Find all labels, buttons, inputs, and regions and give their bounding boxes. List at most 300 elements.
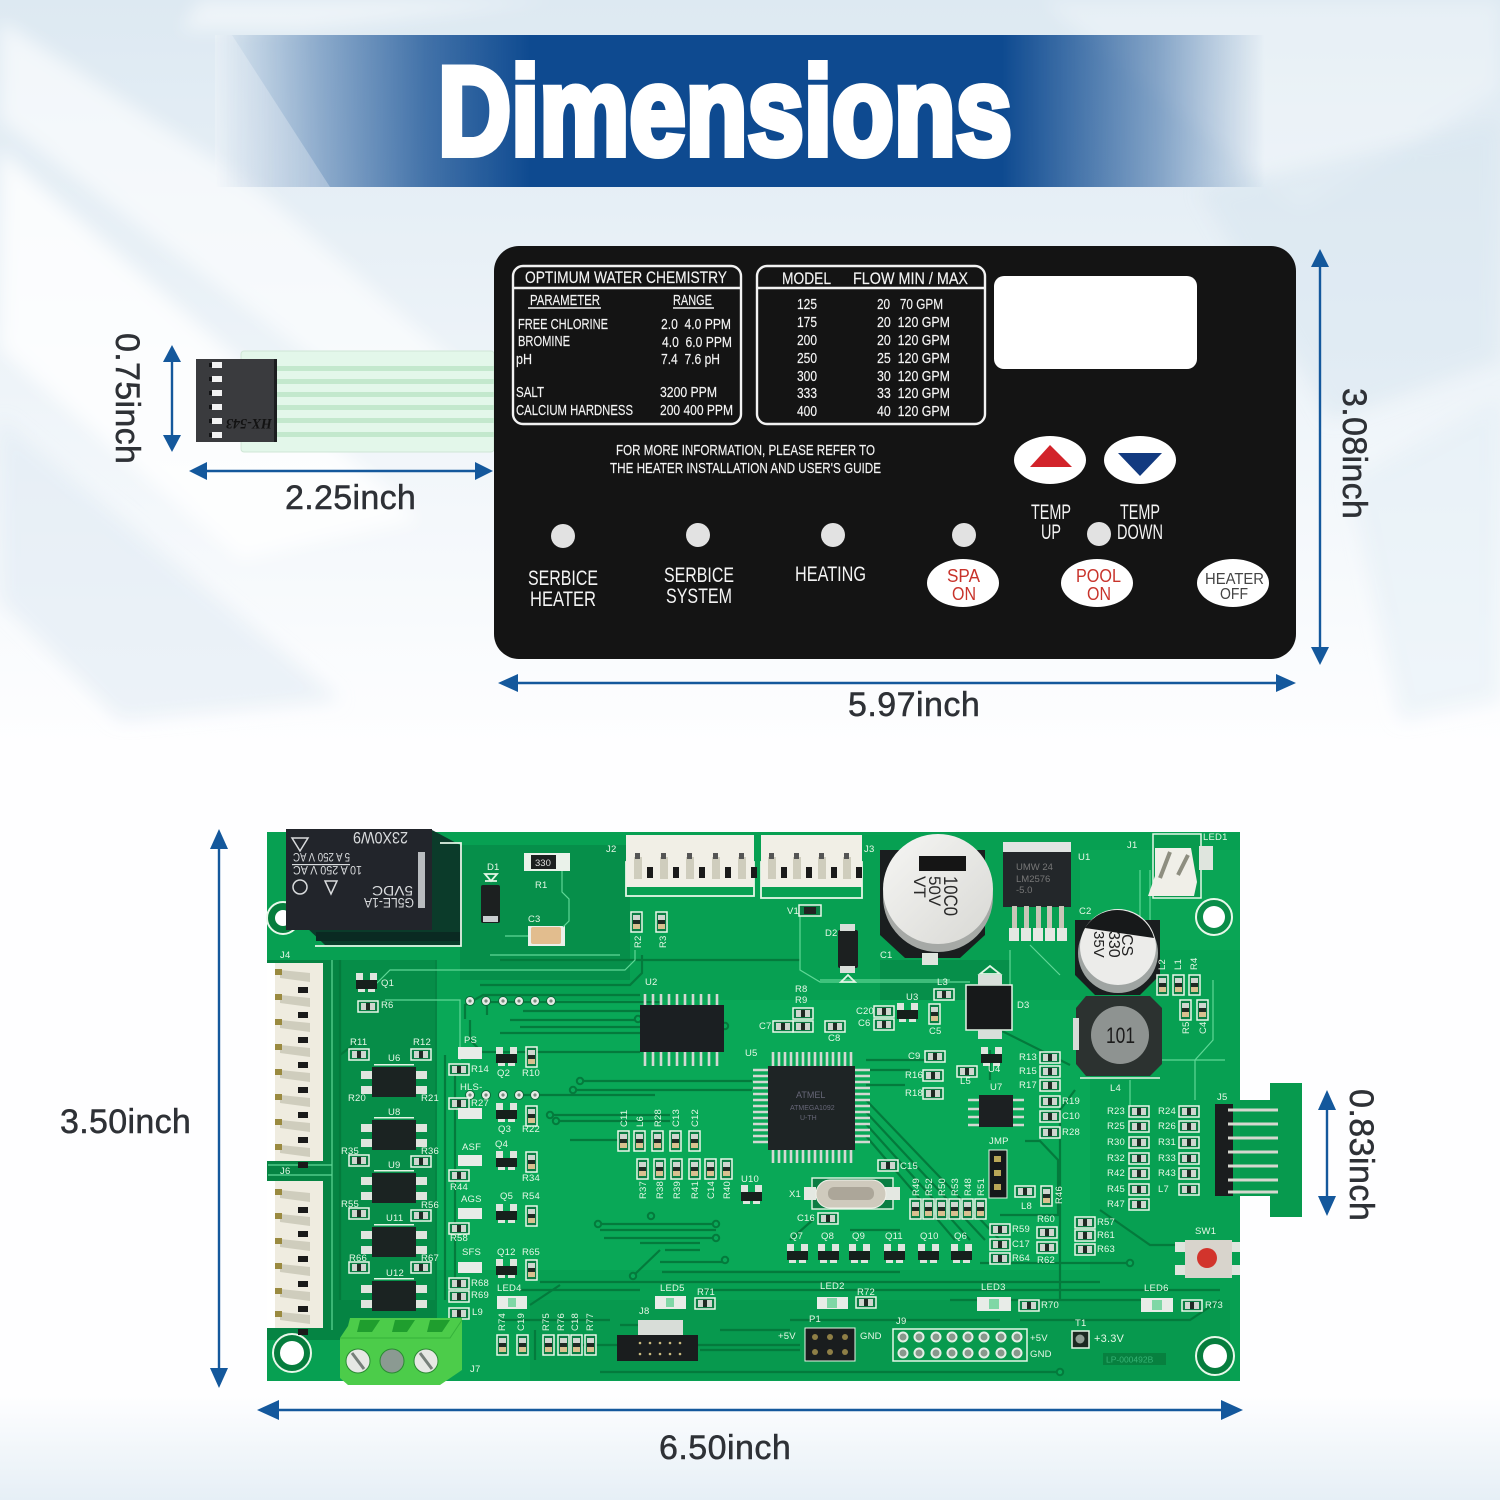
capacitor C1 bbox=[880, 834, 993, 965]
resistors near J5: R32 bbox=[1107, 1153, 1125, 1164]
bottom components: R77 bbox=[585, 1313, 596, 1331]
water chemistry table: OPTIMUM WATER CHEMISTRY bbox=[525, 268, 727, 287]
copper traces bbox=[268, 870, 1225, 1375]
water chemistry table: 7.4 7.6 pH bbox=[661, 352, 720, 368]
parts around C2 right: L1 bbox=[1173, 959, 1184, 970]
dimension: ribbon height 0.75inch: 0.75inch bbox=[108, 333, 146, 464]
left column resistors: R66 bbox=[349, 1253, 367, 1264]
small parts near relay: C3 bbox=[528, 914, 541, 925]
chip U2 bbox=[640, 977, 724, 1066]
relay: 10 A 250 V AC bbox=[293, 863, 362, 877]
power section parts: C20 bbox=[856, 1006, 874, 1017]
button: pool on bbox=[1061, 559, 1133, 607]
label: temp down: DOWN bbox=[1117, 521, 1163, 544]
model flow table: MODEL bbox=[782, 269, 831, 288]
relay: G5LE-1A bbox=[363, 895, 414, 911]
test point T1 bbox=[1072, 1318, 1125, 1348]
transistors row: Q7 bbox=[790, 1231, 803, 1242]
dimension: panel height 3.08inch bbox=[1311, 249, 1373, 665]
capacitor C2: CS bbox=[1118, 934, 1135, 956]
signal sections: R22 bbox=[522, 1124, 540, 1135]
dimension: connector tab 0.83inch bbox=[1318, 1089, 1380, 1221]
connector J4 bbox=[267, 950, 323, 1168]
model flow table: 300 bbox=[797, 369, 817, 385]
dimension: ribbon height 0.75inch bbox=[108, 333, 181, 464]
label: service system: SYSTEM bbox=[666, 585, 732, 608]
resistor bank: R50 bbox=[937, 1178, 948, 1196]
lower right parts bbox=[990, 1214, 1115, 1266]
inductor L4 bbox=[1073, 996, 1162, 1094]
resistors near J5: R45 bbox=[1107, 1184, 1125, 1195]
header P1: +5V bbox=[778, 1331, 796, 1342]
capacitor C2: 35V bbox=[1090, 931, 1107, 958]
model flow table: 20 120 GPM bbox=[877, 333, 950, 349]
label: temp up: UP bbox=[1041, 521, 1061, 544]
optocouplers bbox=[361, 1053, 427, 1311]
test point T1: T1 bbox=[1075, 1318, 1086, 1329]
header P1: P1 bbox=[809, 1314, 821, 1325]
model flow table: 333 bbox=[797, 386, 817, 402]
power section parts: R8 bbox=[795, 984, 808, 995]
title banner bbox=[215, 35, 1265, 187]
signal sections: Q12 bbox=[497, 1247, 516, 1258]
power section parts: U4 bbox=[988, 1064, 1001, 1075]
resistor bank: R52 bbox=[924, 1178, 935, 1196]
model flow table: 33 120 GPM bbox=[877, 386, 950, 402]
parts around C2 right bbox=[1157, 957, 1209, 1034]
crystal X1: C16 bbox=[797, 1213, 815, 1224]
capacitor C2: 330 bbox=[1105, 931, 1122, 958]
connector J6: J6 bbox=[280, 1166, 290, 1177]
optocouplers: U12 bbox=[386, 1268, 404, 1279]
R2 R3: R2 bbox=[633, 935, 644, 948]
crystal X1: X1 bbox=[789, 1189, 801, 1200]
signal sections: R10 bbox=[522, 1068, 540, 1079]
button: heater off bbox=[1197, 559, 1269, 607]
jumper JMP: JMP bbox=[989, 1136, 1009, 1147]
left column resistors: R6 bbox=[381, 1000, 394, 1011]
LEDs row bbox=[655, 1281, 1223, 1312]
water chemistry table: 2.0 4.0 PPM bbox=[661, 317, 731, 333]
resistor bank: R48 bbox=[963, 1178, 974, 1196]
dimension: panel width 5.97inch: 5.97inch bbox=[848, 686, 980, 724]
bottom components: R75 bbox=[541, 1313, 552, 1331]
model flow table: 200 bbox=[797, 333, 817, 349]
left column resistors: R56 bbox=[421, 1200, 439, 1211]
bottom components: R74 bbox=[497, 1313, 508, 1331]
lower right parts: R60 bbox=[1037, 1214, 1055, 1225]
transistors row: Q9 bbox=[852, 1231, 865, 1242]
jumper JMP bbox=[989, 1136, 1009, 1198]
ribbon connector: HX-543 bbox=[226, 415, 273, 431]
signal sections: PS bbox=[464, 1035, 477, 1046]
signal sections: R14 bbox=[471, 1064, 489, 1075]
connector J1 and LED1: LED1 bbox=[1203, 832, 1228, 843]
model flow table: FLOW MIN / MAX bbox=[853, 269, 968, 288]
centre capacitors: R39 bbox=[672, 1181, 683, 1199]
indicator lights bbox=[551, 522, 1111, 548]
title: Dimensions bbox=[438, 42, 1012, 182]
model flow table: 20 120 GPM bbox=[877, 315, 950, 331]
centre capacitors bbox=[618, 1109, 762, 1204]
connector J3: J3 bbox=[864, 844, 874, 855]
parts around C2 right: C4 bbox=[1198, 1021, 1209, 1034]
relay bbox=[286, 828, 462, 946]
optocouplers: U11 bbox=[386, 1213, 403, 1224]
header P1 bbox=[778, 1314, 882, 1361]
dimension: board width 6.50inch: 6.50inch bbox=[659, 1429, 791, 1467]
power section parts: C5 bbox=[929, 1026, 942, 1037]
regulator U1: -5.0 bbox=[1016, 885, 1032, 896]
left column resistors: R36 bbox=[421, 1146, 439, 1157]
water chemistry table bbox=[513, 266, 741, 424]
centre capacitors: R37 bbox=[638, 1181, 649, 1199]
power section parts: L5 bbox=[960, 1076, 971, 1087]
dimension: ribbon width 2.25inch bbox=[189, 462, 493, 517]
header J9: GND bbox=[1030, 1349, 1052, 1360]
transistors row: Q10 bbox=[920, 1231, 939, 1242]
model flow table: 20 70 GPM bbox=[877, 297, 943, 313]
microcontroller U5: U5 bbox=[745, 1048, 758, 1059]
label: service heater: SERBICE bbox=[528, 567, 598, 590]
resistors near J5: L7 bbox=[1158, 1184, 1169, 1195]
relay: 5 A 250 V AC bbox=[293, 850, 350, 864]
chip U2: U2 bbox=[645, 977, 658, 988]
power section parts: C6 bbox=[858, 1018, 871, 1029]
inductor L4: L4 bbox=[1110, 1083, 1121, 1094]
signal sections: R27 bbox=[471, 1098, 489, 1109]
power section parts: R15 bbox=[1019, 1066, 1037, 1077]
lower right parts: R64 bbox=[1012, 1253, 1030, 1264]
button: pool on: ON bbox=[1087, 584, 1111, 604]
power section parts: R16 bbox=[905, 1070, 923, 1081]
switch SW1 bbox=[1175, 1226, 1240, 1278]
water chemistry table: pH bbox=[516, 352, 532, 368]
capacitor C1: 10C0 bbox=[939, 876, 960, 916]
info note: THE HEATER INSTALLATION AND USER'S GUIDE bbox=[610, 461, 881, 477]
button: heater off: HEATER bbox=[1205, 571, 1264, 588]
centre capacitors: C11 bbox=[619, 1110, 630, 1127]
header J9: +5V bbox=[1030, 1333, 1048, 1344]
signal sections: HLS- bbox=[460, 1082, 482, 1093]
capacitor C1: 50V bbox=[925, 876, 944, 907]
left column resistors: Q1 bbox=[381, 978, 394, 989]
R2 R3: R3 bbox=[658, 935, 669, 948]
relay: 5VDC bbox=[372, 883, 413, 899]
button: heater off: OFF bbox=[1220, 586, 1248, 603]
centre capacitors: C13 bbox=[671, 1109, 682, 1127]
power section parts bbox=[759, 905, 1080, 1138]
resistors near J5: R23 bbox=[1107, 1106, 1125, 1117]
water chemistry table: 4.0 6.0 PPM bbox=[662, 335, 732, 351]
lower right parts: C17 bbox=[1012, 1239, 1030, 1250]
microcontroller U5: U-TH bbox=[800, 1115, 817, 1122]
ribbon cable with connector bbox=[196, 351, 494, 452]
signal sections: R69 bbox=[471, 1290, 489, 1301]
optocouplers: U9 bbox=[388, 1160, 401, 1171]
resistor bank: R53 bbox=[950, 1178, 961, 1196]
resistors near J5: R30 bbox=[1107, 1137, 1125, 1148]
regulator U1: U1 bbox=[1078, 852, 1091, 863]
signal sections: R54 bbox=[522, 1191, 540, 1202]
signal sections: R68 bbox=[471, 1278, 489, 1289]
small parts near relay: 330 bbox=[535, 858, 551, 869]
model flow table bbox=[757, 266, 985, 424]
optocouplers: U6 bbox=[388, 1053, 401, 1064]
signal sections bbox=[449, 1035, 540, 1319]
centre capacitors: R40 bbox=[722, 1181, 733, 1199]
header J9: J9 bbox=[896, 1316, 906, 1327]
connector J3 bbox=[761, 835, 874, 898]
centre capacitors: C14 bbox=[706, 1181, 717, 1199]
mounting holes bbox=[267, 899, 1234, 1375]
left column resistors: R67 bbox=[421, 1253, 439, 1264]
transistors row: Q8 bbox=[821, 1231, 834, 1242]
water chemistry table: BROMINE bbox=[518, 334, 570, 350]
capacitor C2: C2 bbox=[1079, 906, 1092, 917]
water chemistry table: RANGE bbox=[673, 293, 712, 309]
lower right parts: R59 bbox=[1012, 1224, 1030, 1235]
LEDs row: LED3 bbox=[981, 1282, 1006, 1293]
power section parts: U7 bbox=[990, 1082, 1003, 1093]
connector J2: J2 bbox=[606, 844, 616, 855]
optocouplers: U8 bbox=[388, 1107, 401, 1118]
power section parts: R19 bbox=[1062, 1096, 1080, 1107]
resistor bank bbox=[910, 1178, 1065, 1219]
small parts near relay bbox=[481, 853, 570, 946]
resistors near J5 bbox=[1107, 1106, 1199, 1210]
lower right parts: R57 bbox=[1097, 1217, 1115, 1228]
model flow table: 30 120 GPM bbox=[877, 369, 950, 385]
label: temp down bbox=[1117, 501, 1163, 544]
crystal X1: C15 bbox=[900, 1161, 918, 1172]
label: temp down: TEMP bbox=[1120, 501, 1160, 524]
resistors near J5: R31 bbox=[1158, 1137, 1176, 1148]
button: temp down bbox=[1104, 436, 1176, 484]
label: service heater: HEATER bbox=[530, 588, 596, 611]
label: service heater bbox=[528, 567, 598, 611]
transistors row: Q6 bbox=[954, 1231, 967, 1242]
resistor bank: L8 bbox=[1021, 1201, 1032, 1212]
connector J4: J4 bbox=[280, 950, 290, 961]
diode D3 bbox=[966, 966, 1030, 1039]
water chemistry table: PARAMETER bbox=[530, 293, 600, 309]
dimension: board height 3.50inch bbox=[60, 829, 228, 1388]
resistors near J5: R42 bbox=[1107, 1168, 1125, 1179]
button: spa on bbox=[927, 559, 999, 607]
LEDs row: R72 bbox=[857, 1287, 875, 1298]
power section parts: C9 bbox=[908, 1051, 921, 1062]
model flow table: 25 120 GPM bbox=[877, 351, 950, 367]
capacitor C2 bbox=[1075, 906, 1160, 995]
parts around C2 right: L2 bbox=[1157, 959, 1168, 970]
transistors row: Q11 bbox=[885, 1231, 903, 1242]
PCB circuit board bbox=[267, 828, 1302, 1385]
lower right parts: R61 bbox=[1097, 1230, 1115, 1241]
power section parts: C7 bbox=[759, 1021, 772, 1032]
terminal block J7: J7 bbox=[470, 1364, 480, 1375]
dimension: board height 3.50inch: 3.50inch bbox=[60, 1103, 191, 1141]
regulator U1: LM2576 bbox=[1016, 874, 1050, 885]
parts around C2 right: R4 bbox=[1189, 957, 1200, 970]
centre capacitors: R28 bbox=[653, 1109, 664, 1127]
part number box: LP-000492B bbox=[1106, 1354, 1154, 1364]
dimension: connector tab 0.83inch: 0.83inch bbox=[1342, 1089, 1380, 1221]
connector J5 with pins bbox=[1215, 1092, 1278, 1196]
signal sections: L9 bbox=[472, 1307, 483, 1318]
LEDs row: LED5 bbox=[660, 1283, 685, 1294]
resistor bank: R51 bbox=[976, 1178, 987, 1196]
dimension: board width 6.50inch bbox=[257, 1400, 1243, 1467]
centre capacitors: L6 bbox=[635, 1116, 646, 1127]
signal sections: R34 bbox=[522, 1173, 540, 1184]
part number box bbox=[1103, 1353, 1166, 1365]
signal sections: SFS bbox=[462, 1247, 481, 1258]
label: temp up: TEMP bbox=[1031, 501, 1071, 524]
left column resistors: R55 bbox=[341, 1199, 359, 1210]
power section parts: R28 bbox=[1062, 1127, 1080, 1138]
membrane panel bbox=[494, 246, 1296, 659]
transistors row bbox=[787, 1231, 972, 1263]
LEDs row: R73 bbox=[1205, 1300, 1223, 1311]
button: temp up bbox=[1014, 436, 1086, 484]
label: service system: SERBICE bbox=[664, 564, 734, 587]
power section parts: U3 bbox=[906, 992, 919, 1003]
resistor bank: R46 bbox=[1054, 1186, 1065, 1204]
model flow table: 40 120 GPM bbox=[877, 404, 950, 420]
signal sections: R58 bbox=[450, 1233, 468, 1244]
model flow table: 400 bbox=[797, 404, 817, 420]
test pads row bbox=[466, 996, 556, 1100]
label: service system bbox=[664, 564, 734, 608]
capacitor C1: VT bbox=[910, 876, 929, 898]
diode D2: D2 bbox=[825, 928, 838, 939]
left column resistors bbox=[341, 973, 439, 1273]
resistors near J5: R26 bbox=[1158, 1121, 1176, 1132]
water chemistry table: 200 400 PPM bbox=[660, 403, 733, 419]
power section parts: C8 bbox=[828, 1033, 841, 1044]
dimension: panel height 3.08inch: 3.08inch bbox=[1335, 388, 1373, 519]
microcontroller U5: ATMEL bbox=[796, 1090, 825, 1100]
power section parts: L3 bbox=[937, 977, 948, 988]
signal sections: R65 bbox=[522, 1247, 540, 1258]
water chemistry table: CALCIUM HARDNESS bbox=[516, 403, 633, 419]
small parts near relay: R1 bbox=[535, 880, 548, 891]
centre capacitors: R41 bbox=[690, 1181, 701, 1199]
bottom components: C18 bbox=[570, 1313, 581, 1331]
bottom components: C19 bbox=[516, 1313, 527, 1331]
bottom components: R76 bbox=[556, 1313, 567, 1331]
power section parts: R9 bbox=[795, 995, 808, 1006]
relay: 23X0W9 bbox=[353, 828, 408, 847]
label: temp up bbox=[1031, 501, 1071, 544]
dimension: ribbon width 2.25inch: 2.25inch bbox=[285, 479, 416, 517]
signal sections: R44 bbox=[450, 1182, 468, 1193]
terminal block J7 bbox=[340, 1318, 480, 1385]
resistor bank: R49 bbox=[911, 1178, 922, 1196]
left column resistors: R12 bbox=[413, 1037, 431, 1048]
LEDs row: R71 bbox=[697, 1287, 715, 1298]
regulator U1 bbox=[1003, 842, 1091, 941]
connector J1 and LED1: J1 bbox=[1127, 840, 1137, 851]
signal sections: Q2 bbox=[497, 1068, 510, 1079]
label: heating: HEATING bbox=[795, 563, 866, 586]
capacitor C1: C1 bbox=[880, 950, 893, 961]
left column resistors: R20 bbox=[348, 1093, 366, 1104]
connector J2 bbox=[606, 835, 757, 896]
diode D3: D3 bbox=[1017, 1000, 1030, 1011]
connector J6 bbox=[267, 1166, 323, 1335]
signal sections: AGS bbox=[461, 1194, 482, 1205]
R2 R3 bbox=[631, 912, 669, 948]
button: spa on: ON bbox=[952, 584, 976, 604]
centre capacitors: U10 bbox=[741, 1174, 759, 1185]
signal sections: LED4 bbox=[497, 1283, 522, 1294]
small parts near relay: D1 bbox=[487, 862, 500, 873]
dimension: panel width 5.97inch bbox=[498, 674, 1296, 724]
test point T1: +3.3V bbox=[1094, 1333, 1125, 1345]
bottom components bbox=[497, 1313, 596, 1355]
LEDs row: LED6 bbox=[1144, 1283, 1169, 1294]
crystal X1 bbox=[789, 1160, 918, 1224]
button: spa on: SPA bbox=[947, 566, 980, 586]
connector J1 and LED1 bbox=[1127, 832, 1228, 898]
power section parts: C10 bbox=[1062, 1111, 1080, 1122]
water chemistry table: 3200 PPM bbox=[660, 385, 717, 401]
regulator U1: UMW 24 bbox=[1016, 862, 1053, 873]
centre capacitors: C12 bbox=[690, 1109, 701, 1127]
left column resistors: R35 bbox=[341, 1146, 359, 1157]
model flow table: 250 bbox=[797, 351, 817, 367]
LEDs row: R70 bbox=[1041, 1300, 1059, 1311]
resistors near J5: R33 bbox=[1158, 1153, 1176, 1164]
header J9 bbox=[893, 1316, 1052, 1361]
model flow table: 125 bbox=[797, 297, 817, 313]
LEDs row: LED2 bbox=[820, 1281, 845, 1292]
water chemistry table: SALT bbox=[516, 385, 544, 401]
resistors near J5: R43 bbox=[1158, 1168, 1176, 1179]
power section parts: R17 bbox=[1019, 1080, 1037, 1091]
left column resistors: R11 bbox=[350, 1037, 367, 1048]
left column resistors: R21 bbox=[421, 1093, 439, 1104]
signal sections: Q4 bbox=[495, 1139, 508, 1150]
switch SW1: SW1 bbox=[1195, 1226, 1216, 1237]
info note bbox=[610, 443, 881, 477]
display window bbox=[994, 276, 1197, 369]
model flow table: 175 bbox=[797, 315, 817, 331]
header J8: J8 bbox=[639, 1306, 649, 1317]
connector J5 with pins: J5 bbox=[1217, 1092, 1227, 1103]
microcontroller U5: ATMEGA1092 bbox=[790, 1105, 835, 1112]
lower right parts: R63 bbox=[1097, 1244, 1115, 1255]
resistors near J5: R47 bbox=[1107, 1199, 1125, 1210]
water chemistry table: FREE CHLORINE bbox=[518, 317, 608, 333]
resistors near J5: R25 bbox=[1107, 1121, 1125, 1132]
signal sections: Q3 bbox=[498, 1124, 511, 1135]
microcontroller U5 bbox=[745, 1048, 870, 1163]
lower right parts: R62 bbox=[1037, 1255, 1055, 1266]
resistors near J5: R24 bbox=[1158, 1106, 1176, 1117]
parts around C2 right: R5 bbox=[1181, 1021, 1192, 1034]
power section parts: V1 bbox=[787, 906, 799, 917]
power section parts: R13 bbox=[1019, 1052, 1037, 1063]
signal sections: Q5 bbox=[500, 1191, 513, 1202]
signal sections: ASF bbox=[462, 1142, 481, 1153]
info note: FOR MORE INFORMATION, PLEASE REFER TO bbox=[616, 443, 875, 459]
diode D2 bbox=[825, 924, 858, 982]
header P1: GND bbox=[860, 1331, 882, 1342]
button: pool on: POOL bbox=[1076, 566, 1121, 586]
